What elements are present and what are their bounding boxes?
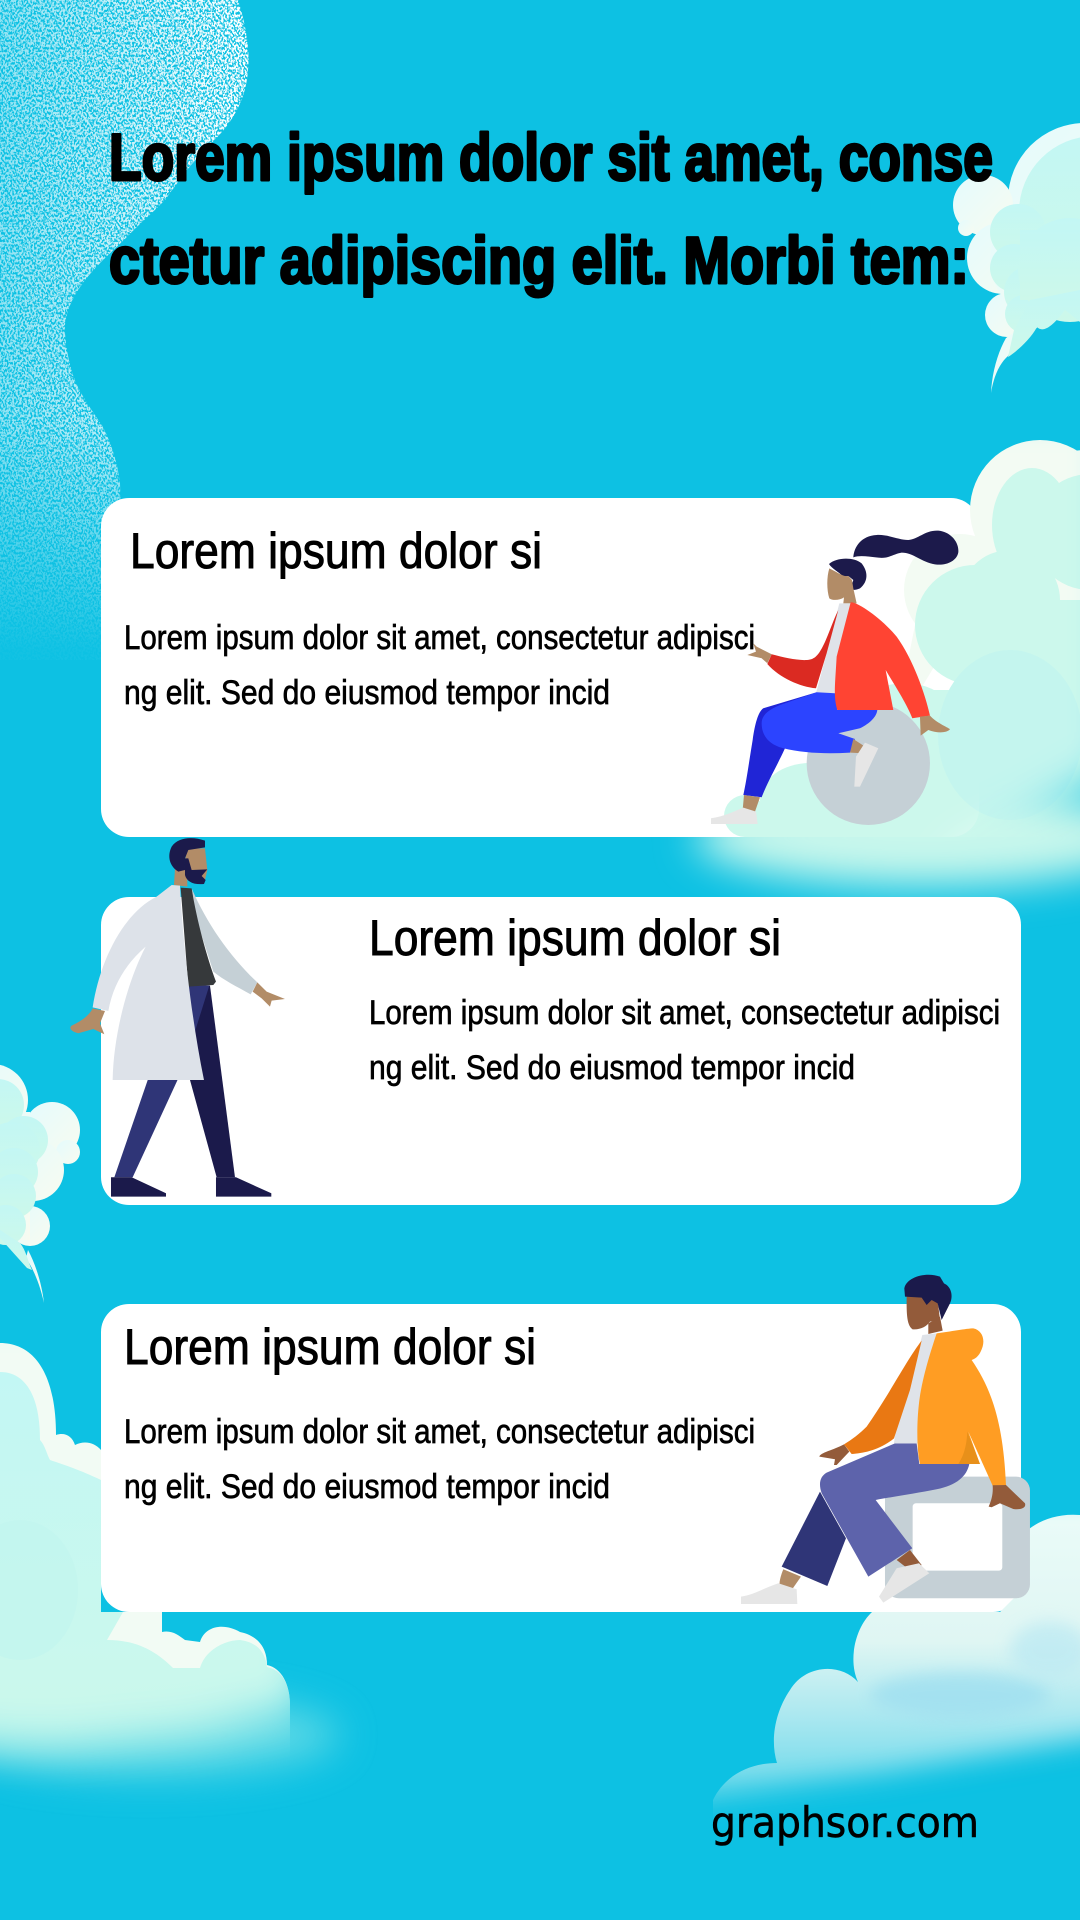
shoes (711, 743, 878, 824)
neck (928, 1317, 943, 1334)
hair (904, 1275, 952, 1320)
beard (185, 858, 207, 884)
card 3 (101, 1304, 1021, 1612)
coat (93, 885, 204, 1080)
title (109, 120, 993, 297)
card 1 body text: ng elit. Sed do eiusmod tempor incid (124, 674, 610, 712)
card 3 body text (124, 1413, 755, 1506)
far hand (253, 982, 285, 1007)
far hand (747, 643, 772, 663)
face (907, 1293, 940, 1329)
cloud glow: below card 1 (695, 790, 1080, 886)
far hand (819, 1444, 849, 1465)
front ankle (897, 1550, 922, 1572)
card 2 heading: Lorem ipsum dolor si (369, 910, 781, 966)
near hand (920, 716, 950, 736)
face (185, 848, 207, 880)
card 1 body text: Lorem ipsum dolor sit amet, consectetur adipisci (124, 619, 755, 657)
near hand (989, 1485, 1025, 1509)
jacket (835, 602, 930, 718)
shirt (181, 888, 216, 987)
far sleeve (767, 610, 838, 688)
front shoe (879, 1563, 929, 1603)
legs (114, 1078, 178, 1177)
face and neck (827, 568, 857, 603)
front leg (762, 692, 877, 753)
back shoe (741, 1583, 797, 1604)
figure: doctor walking (70, 838, 285, 1197)
footer: graphsor.com: graphsor.com (711, 1798, 979, 1847)
jacket shadow (958, 1432, 980, 1464)
back leg (782, 1492, 846, 1586)
cloud glow: bottom left (0, 1695, 340, 1775)
back ankle (779, 1569, 801, 1590)
ankles (743, 739, 865, 812)
near hand (70, 1008, 105, 1034)
shirt (894, 1333, 937, 1443)
hair (169, 838, 205, 872)
card 1 body text (124, 619, 755, 712)
ball (807, 702, 930, 825)
speckled texture shape, top left (0, 0, 260, 660)
cloud: bottom right (713, 1515, 1080, 1840)
hair (829, 531, 958, 590)
cube seat (885, 1477, 1030, 1598)
shirt (816, 603, 851, 693)
cloud: left middle (0, 1064, 80, 1303)
card 2 body text (369, 994, 1000, 1087)
figure: man seated on cube (741, 1275, 1030, 1604)
card 2 body text: ng elit. Sed do eiusmod tempor incid (369, 1049, 855, 1087)
far arm (192, 888, 257, 994)
jacket (917, 1328, 1006, 1486)
back leg (743, 692, 817, 797)
card 2 body text: Lorem ipsum dolor sit amet, consectetur adipisci (369, 994, 1000, 1032)
figure: woman seated on ball (711, 531, 958, 825)
cloud: bottom left (0, 1343, 290, 1800)
card 3 heading: Lorem ipsum dolor si (124, 1319, 536, 1375)
shoes (111, 1177, 271, 1197)
card 3 body text: Lorem ipsum dolor sit amet, consectetur adipisci (124, 1413, 755, 1451)
neck (174, 868, 187, 887)
cloud: top right (953, 123, 1080, 393)
card 1 (101, 498, 979, 837)
front leg (820, 1443, 969, 1577)
far sleeve (844, 1341, 922, 1454)
card 1 heading: Lorem ipsum dolor si (130, 523, 542, 579)
card 3 body text: ng elit. Sed do eiusmod tempor incid (124, 1468, 610, 1506)
card 2 (101, 897, 1021, 1205)
cloud: right middle, overlapping card 1 (724, 440, 1080, 837)
